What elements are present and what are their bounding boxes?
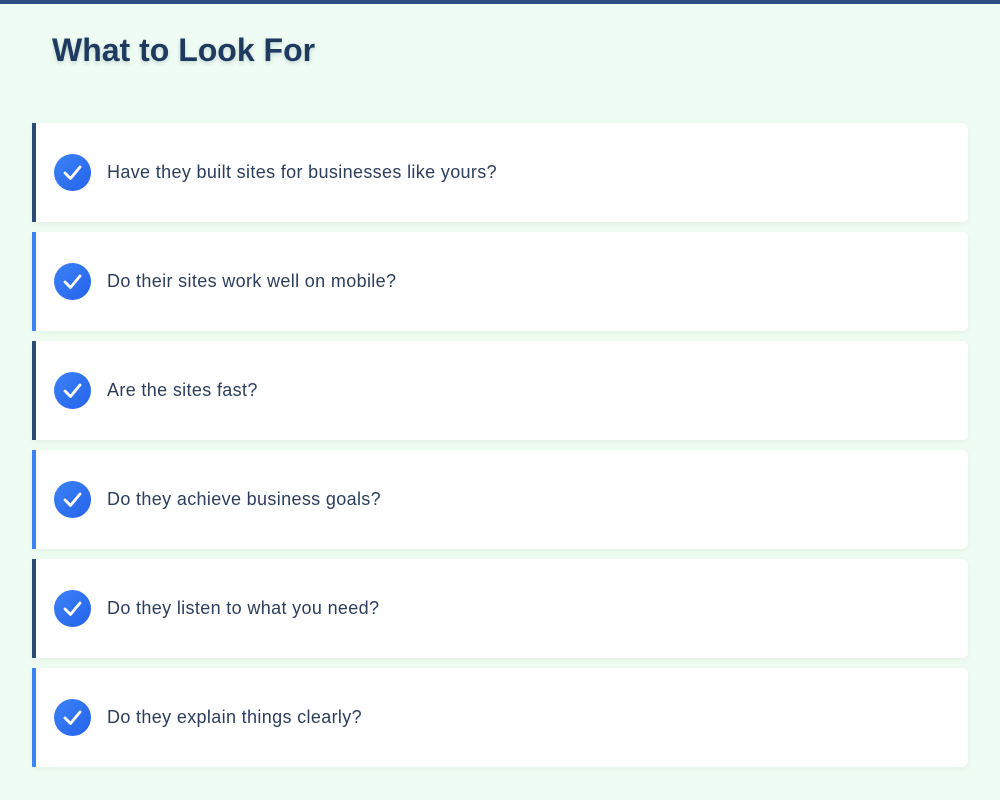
text: Do they explain things clearly? bbox=[107, 707, 362, 727]
icon: check bbox=[54, 372, 91, 409]
text: Are the sites fast? bbox=[107, 380, 258, 400]
card 2 bbox=[32, 232, 968, 331]
card 6 bbox=[32, 668, 968, 767]
icon: check bbox=[54, 481, 91, 518]
text: Do their sites work well on mobile? bbox=[107, 271, 396, 291]
text: Have they built sites for businesses like yours? bbox=[107, 162, 497, 182]
title: What to Look For bbox=[52, 32, 315, 68]
text: Do they listen to what you need? bbox=[107, 598, 379, 618]
icon: check bbox=[54, 263, 91, 300]
icon: check bbox=[54, 699, 91, 736]
icon: check bbox=[54, 154, 91, 191]
text: Do they achieve business goals? bbox=[107, 489, 381, 509]
card 5 bbox=[32, 559, 968, 658]
card 1 bbox=[32, 123, 968, 222]
card 3 bbox=[32, 341, 968, 440]
card 4 bbox=[32, 450, 968, 549]
icon: check bbox=[54, 590, 91, 627]
